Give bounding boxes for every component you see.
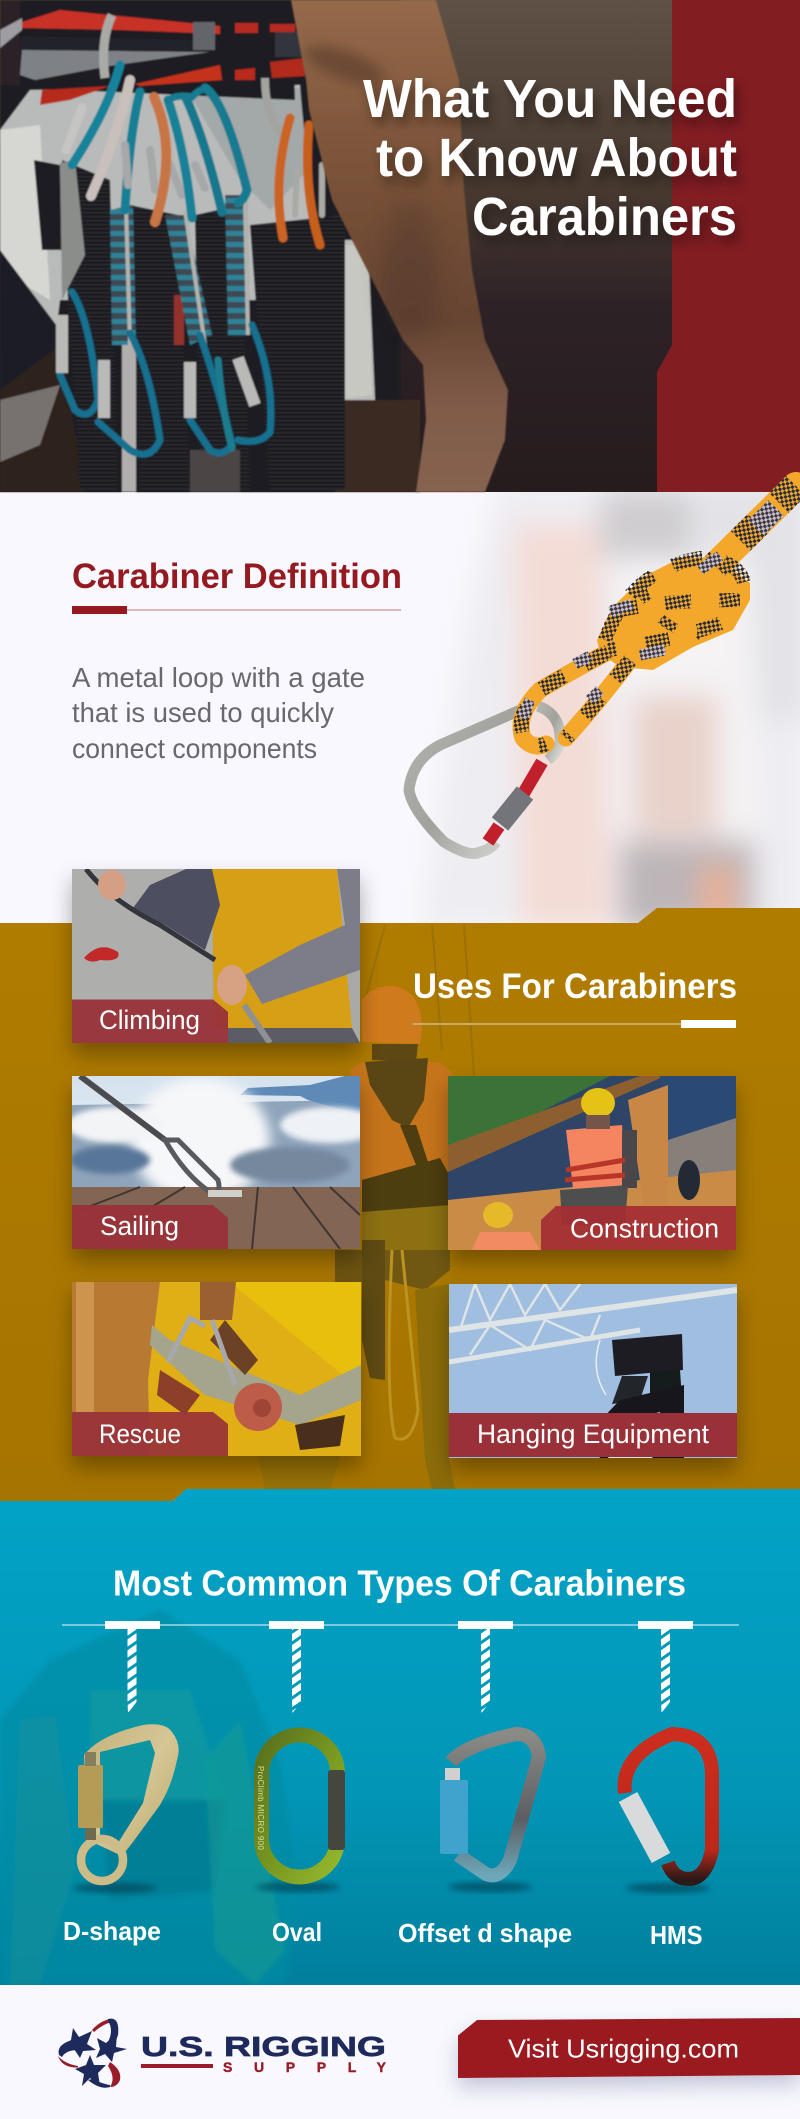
heading underline [413,1020,736,1028]
label: offset d shape: Offset d shape [398,1918,572,1948]
label: construction: Construction [570,1214,719,1244]
heading: Uses For Carabiners [413,967,737,1006]
rope [521,486,796,746]
definition text [72,662,365,764]
card: climbing [72,869,360,1043]
card: construction [448,1076,736,1250]
definition text: A metal loop with a gate [72,662,365,693]
shorts [0,85,375,400]
hero photo: arm [291,0,508,492]
wordmark: U.S. RIGGING [141,2031,386,2062]
heading: Carabiner Definition [72,557,402,596]
background climber silhouette [0,1611,287,1985]
harness belt [20,0,305,135]
hero photo: climbing harness with carabiners [0,0,420,492]
title: to Know About [376,128,737,188]
hero tapes [60,160,250,345]
label: climbing [72,1000,228,1043]
wordmark underline [141,2064,213,2068]
wordmark supply: SUPPLY [223,2059,387,2075]
hanger: d-shape [105,1621,160,1713]
panel: footer [0,1985,800,2119]
label: rescue: Rescue [99,1419,181,1449]
blurred background person [432,492,800,923]
rail [62,1624,739,1626]
logo [58,2019,387,2088]
heading: Most Common Types Of Carabiners [113,1562,686,1604]
illustration: rope and carabiner [409,486,796,854]
card: rescue [72,1282,361,1456]
label: hanging equipment [449,1413,737,1457]
engraved text: ProClimb MICRO 900 [256,1766,265,1851]
card: sailing [67,1072,380,1249]
label: sailing: Sailing [100,1211,179,1241]
carabiner: hms [625,1734,712,1893]
card: hanging equipment [449,1284,737,1460]
hanger: hms [638,1621,693,1713]
label: sailing [72,1205,228,1249]
label: d-shape: D-shape [63,1916,161,1946]
definition text: that is used to quickly [72,697,334,728]
background worker silhouette [258,925,475,1490]
label: oval: Oval [272,1917,322,1947]
title: Carabiners [472,187,737,247]
hero straps [34,160,345,492]
rope light flecks [522,508,776,718]
call to action button: Visit Usrigging.com [508,2034,739,2064]
label: hanging equipment: Hanging Equipment [477,1419,709,1449]
carabiner: d-shape [73,1724,179,1893]
carabiner: oval [256,1735,345,1892]
icon: stars and orbits [58,2019,127,2088]
hero carabiners: lower [60,292,271,454]
hero carabiners: upper [66,65,322,245]
carabiner gate [488,762,542,842]
red band [657,0,800,492]
panel: uses for carabiners [0,869,800,1501]
panel: carabiner definition [72,480,800,930]
panel: hero [0,0,800,492]
rope checks [521,486,796,746]
carabiner: offset d shape [440,1734,539,1892]
label: hms: HMS [650,1920,702,1950]
definition text: connect components [72,733,317,764]
heading underline [72,606,401,614]
title: What You Need [363,69,737,129]
knot body [597,557,750,670]
hanger: oval [269,1621,324,1713]
rope base [521,486,796,746]
label: construction [541,1206,736,1250]
call to action button [458,2018,800,2078]
title [363,69,737,247]
hanger: offset d shape [458,1621,513,1713]
label: climbing: Climbing [99,1005,200,1035]
panel: most common types of carabiners [0,1489,800,1985]
label: rescue [72,1412,228,1456]
carabiner body [409,708,525,854]
